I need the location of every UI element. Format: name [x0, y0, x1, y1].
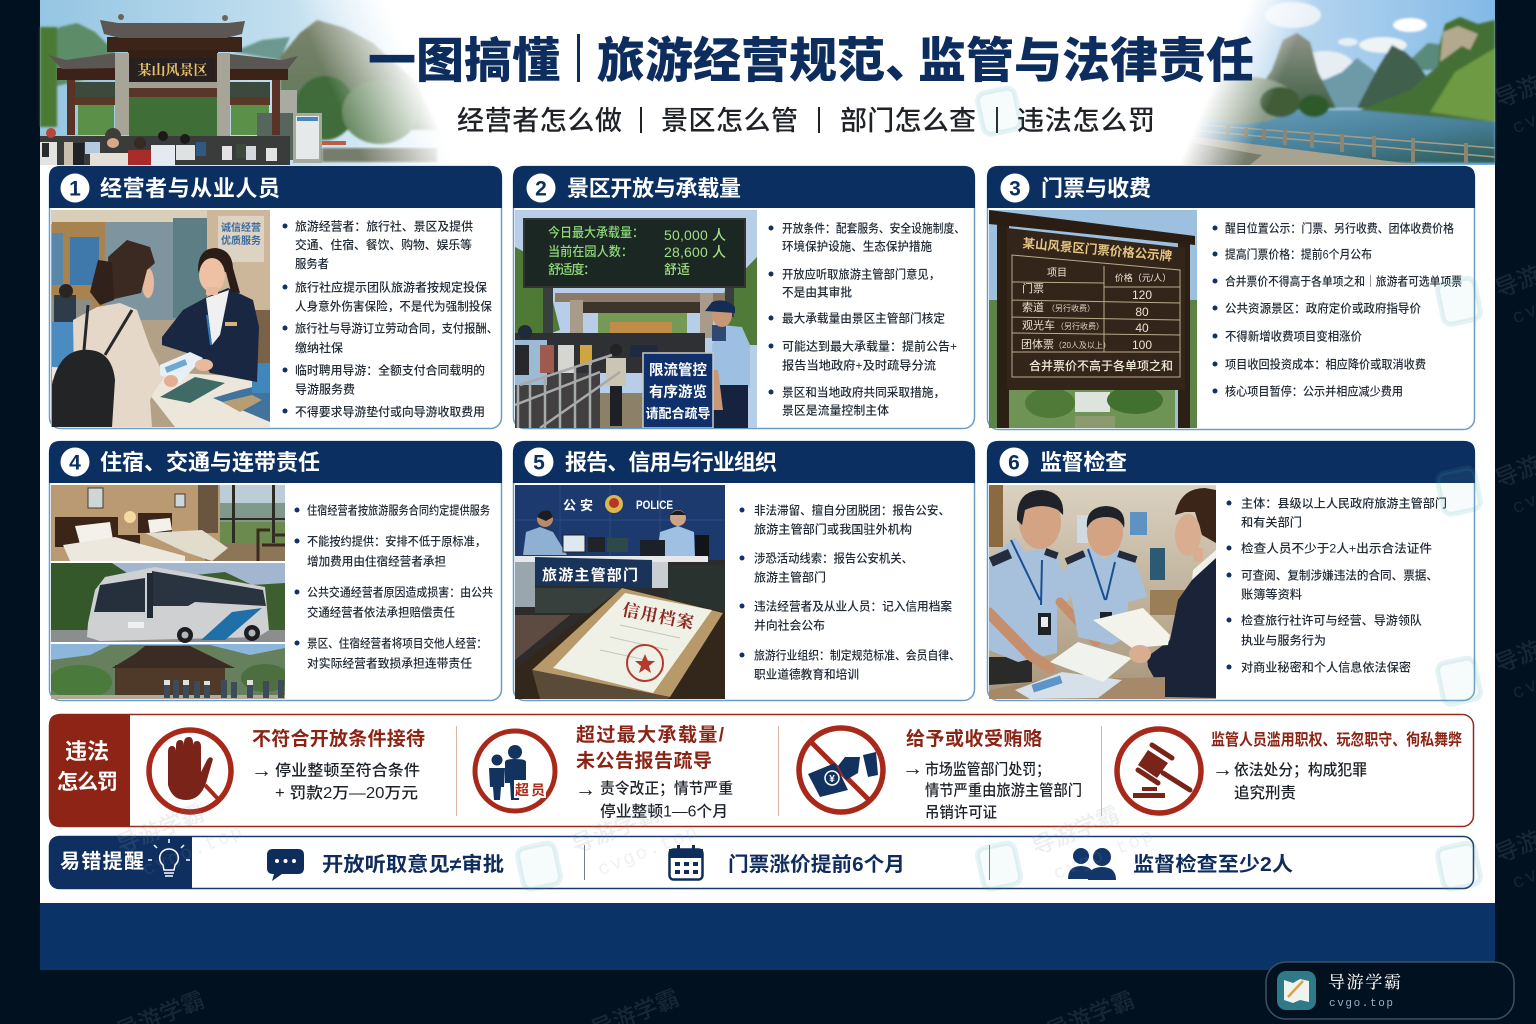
- panel 1 bullet list: 旅行社与导游订立劳动合同，支付报酬、: [295, 320, 498, 336]
- panel 1 bullet list: [282, 218, 498, 419]
- panel 2 bullet list: 报告当地政府+及时疏导分流: [782, 358, 936, 372]
- panel 3 bullet list: 合并票价不得高于各单项之和｜旅游者可选单项票: [1225, 274, 1462, 288]
- department sign: 旅游主管部门: [542, 566, 638, 584]
- icon: brand map: [1277, 971, 1316, 1010]
- violation 3 text: →: [902, 757, 923, 780]
- panel 4 bullet list: 不能按约提供：安排不低于原标准，: [307, 534, 486, 548]
- reminder 3: 监督检查至少2人: [1133, 852, 1293, 876]
- violation 2 text: 未公告报告疏导: [576, 749, 712, 772]
- panel 6: supervision and inspection: [987, 441, 1475, 700]
- price board: （另行收费）: [1056, 321, 1104, 331]
- panel 2 heading: [513, 166, 975, 208]
- icon: stop hand: [149, 730, 231, 812]
- icon: speech bubble: [267, 849, 304, 881]
- panel 5 bullet list: 旅游主管部门: [754, 570, 826, 584]
- panel 4 bullet list: 景区、住宿经营者将项目交他人经营：: [307, 636, 487, 650]
- brand url: cvgo.top: [1329, 998, 1393, 1010]
- violation 1 text: 不符合开放条件接待: [252, 728, 425, 750]
- brand name: 导游学霸: [1328, 973, 1401, 992]
- gate plaque: 某山风景区: [138, 62, 208, 79]
- price board: 某山风景区门票价格公示牌: [1022, 236, 1173, 264]
- brochure handover: [160, 352, 203, 383]
- reminder 2: 门票涨价提前6个月: [728, 853, 905, 876]
- panel 5 bullet list: 旅游行业组织：制定规范标准、会员自律、: [754, 648, 960, 662]
- panel 3 bullet list: 公共资源景区：政府定价或政府指导价: [1225, 300, 1421, 316]
- customer: [73, 303, 165, 427]
- inspector middle: [1060, 506, 1147, 645]
- panel 1: operators and staff: [49, 166, 502, 428]
- counter desk: [52, 367, 270, 427]
- panel 1 bullet list: 旅行社应提示团队旅游者按规定投保: [295, 280, 487, 294]
- crowd control sign: 请配合疏导: [645, 406, 711, 421]
- violation 2 text: 责令改正；情节严重: [600, 780, 733, 798]
- panel 5 bullet list: 非法滞留、擅自分团脱团：报告公安、: [754, 502, 950, 518]
- panel 3 bullet list: 提高门票价格：提前6个月公布: [1225, 246, 1372, 262]
- panel 6 heading: 监督检查: [1040, 450, 1127, 475]
- hero photo left: scenic gate: [40, 0, 480, 165]
- title: 一图搞懂: [368, 35, 560, 88]
- panel 1 bullet list: 服务者: [295, 256, 329, 271]
- panel 1 bullet list: 旅游经营者：旅行社、景区及提供: [295, 218, 473, 234]
- icon: two people: [1068, 848, 1116, 880]
- wooden desk: [515, 615, 570, 660]
- panel 1 photo: travel agency counter: 优质服务: [221, 234, 261, 247]
- panel 6 bullet list: 执业与服务行为: [1241, 632, 1326, 648]
- panel 4 bullet list: 公共交通经营者原因造成损害：由公共: [307, 584, 493, 600]
- panel 4 heading: [49, 441, 502, 483]
- penalty band label: 怎么罚: [57, 771, 118, 794]
- panel 6 photo: inspectors reviewing documents: [989, 485, 1216, 699]
- watermarks: 导游学霸: [113, 799, 208, 858]
- gate plaque: [130, 58, 215, 81]
- panel 6 bullet list: [1226, 496, 1447, 674]
- LED capacity board: 50,000 人: [664, 227, 726, 243]
- panel 4 bullet list: 住宿经营者按旅游服务合同约定提供服务: [307, 502, 490, 518]
- subtitle: 违法怎么罚: [1017, 106, 1155, 136]
- panel 6 bullet list: 账簿等资料: [1241, 586, 1302, 602]
- title: 监管与法律责任: [918, 35, 1254, 88]
- panel 6 bullet list: 和有关部门: [1241, 516, 1302, 530]
- panel 5 heading: 报告、信用与行业组织: [565, 450, 777, 475]
- panel 4: lodging, transport and joint liability: [48, 441, 502, 700]
- gate pillars: [115, 53, 129, 135]
- price board: 门票: [1022, 281, 1044, 295]
- hero photo right: karst river landscape: [1140, 0, 1495, 165]
- violation 2 text: 停业整顿1—6个月: [600, 802, 728, 820]
- panel 1 bullet list: 导游服务费: [295, 382, 355, 396]
- panel 3 bullet list: 项目收回投资成本：相应降价或取消收费: [1225, 356, 1426, 372]
- panel 2 heading: 景区开放与承载量: [567, 176, 741, 201]
- panel 4 heading: 4: [69, 452, 81, 474]
- violation 2 text: →: [575, 778, 596, 801]
- violation 3 text: 吊销许可证: [925, 804, 997, 822]
- panel 5 heading: 5: [533, 452, 545, 474]
- panel 2 bullet list: 可能达到最大承载量：提前公告+: [782, 338, 957, 354]
- panel 6 bullet list: 主体：县级以上人民政府旅游主管部门: [1241, 496, 1447, 510]
- panel 5 bullet list: 职业道德教育和培训: [754, 666, 859, 682]
- LED capacity board: 当前在园人数：: [548, 244, 633, 259]
- icon: gavel: [1117, 729, 1201, 813]
- panel 2 bullet list: 景区和当地政府共同采取措施，: [782, 384, 945, 400]
- watermarks: cvgo.top: [140, 821, 247, 881]
- brand badge: [1266, 962, 1514, 1019]
- price board: 索道: [1022, 300, 1044, 314]
- reminder 1: 开放听取意见≠审批: [322, 852, 504, 876]
- price board: 100: [1132, 338, 1152, 352]
- panel 1 bullet list: 人身意外伤害保险，不是代为强制投保: [295, 298, 492, 314]
- penalty band: how violations are punished: [49, 714, 1474, 827]
- panel 5 bullet list: [740, 502, 960, 682]
- reminder label with bulb: [49, 836, 192, 889]
- crowd control sign: [643, 353, 713, 428]
- panel 2 bullet list: 不是由其审批: [782, 284, 852, 300]
- crowd control sign: 限流管控: [649, 361, 707, 379]
- violation 4 text: →: [1212, 758, 1233, 781]
- panel 3 bullet list: [1212, 220, 1462, 398]
- visitor crowd: [40, 128, 290, 165]
- panel 3: tickets and fees: [987, 166, 1475, 430]
- panel 4 bullet list: 对实际经营者致损承担连带责任: [307, 656, 472, 670]
- backpack: [52, 350, 115, 427]
- price board: 项目: [1047, 267, 1067, 279]
- panel 3 bullet list: 不得新增收费项目变相涨价: [1225, 328, 1362, 344]
- subtitle: [457, 106, 1155, 136]
- visitor crowd and railing: [515, 325, 705, 428]
- panel 6 bullet list: 检查旅行社许可与经营、导游领队: [1241, 612, 1422, 628]
- violation 3 text: 情节严重由旅游主管部门: [925, 780, 1082, 800]
- violation 3 text: 市场监管部门处罚；: [925, 760, 1050, 778]
- panel 6 bullet list: 对商业秘密和个人信息依法保密: [1241, 660, 1411, 674]
- violation 4 text: 监管人员滥用职权、玩忽职守、徇私舞弊: [1211, 730, 1462, 749]
- subtitle: 景区怎么管: [661, 106, 798, 136]
- panel 4 bullet list: [294, 502, 493, 670]
- panel 5 photo: police desk and credit file: [515, 485, 725, 699]
- panel 3 bullet list: 醒目位置公示：门票、另行收费、团体收费价格: [1225, 220, 1454, 236]
- panel 1 bullet list: 交通、住宿、餐饮、购物、娱乐等: [295, 237, 472, 252]
- violation 2 text: 超过最大承载量/: [576, 724, 725, 746]
- panel 1 bullet list: 不得要求导游垫付或向导游收取费用: [295, 404, 485, 419]
- panel 3 photo: ticket price board: [989, 210, 1197, 428]
- penalty band label: [49, 714, 130, 827]
- panel 4 heading: 住宿、交通与连带责任: [100, 450, 320, 475]
- penalty band label: 违法: [65, 739, 109, 764]
- icon: no bribery: ¥: [829, 774, 835, 785]
- violation 3 text: 给予或收受贿赂: [906, 727, 1042, 750]
- panel 1 bullet list: 临时聘用导游：全额支付合同载明的: [295, 362, 485, 378]
- staff member: [162, 288, 259, 382]
- panel 5: reporting, credit and associations: [513, 441, 975, 700]
- LED capacity board: 舒适度：: [548, 262, 596, 277]
- gate main roof: [100, 14, 245, 82]
- panel 5 heading: [513, 441, 975, 483]
- panel 1 heading: 1: [69, 178, 81, 200]
- price board: 观光车: [1022, 318, 1055, 332]
- panel 2: scenic opening and capacity: [513, 166, 975, 428]
- guard: [705, 300, 750, 428]
- panel 6 heading: 6: [1008, 452, 1020, 474]
- price board: 团体票: [1021, 337, 1054, 351]
- icon: overcapacity people: [475, 731, 555, 811]
- desk and documents: [989, 608, 1170, 699]
- watermarks: 导游学霸: [1028, 801, 1123, 860]
- LED capacity board: 今日最大承载量：: [548, 225, 644, 240]
- common mistakes reminder band: [49, 836, 1474, 889]
- pavilion photo: [48, 644, 289, 699]
- price board: 价格（元/人）: [1115, 272, 1171, 283]
- panel 4 bullet list: 增加费用由住宿经营者承担: [307, 554, 446, 568]
- inspector left: [989, 490, 1096, 685]
- panel 1 photo: travel agency counter: 诚信经营: [221, 221, 261, 234]
- price board: （20人及以上）: [1054, 341, 1111, 350]
- violation 4 text: 依法处分；构成犯罪: [1234, 761, 1367, 779]
- coach bus photo: [51, 563, 285, 643]
- violation 2 text: [575, 724, 733, 820]
- info notice board: [293, 113, 322, 163]
- watermarks: 导游学霸: [568, 799, 663, 858]
- officers and monitors: [523, 510, 709, 558]
- panel 5 bullet list: 旅游主管部门或我国驻外机构: [754, 522, 912, 536]
- price board: （另行收费）: [1047, 303, 1095, 313]
- icon: no bribery: [799, 728, 883, 812]
- panel 2 bullet list: 最大承载量由景区主管部门核定: [782, 310, 945, 326]
- panel 2 bullet list: [768, 220, 965, 418]
- violation 1 text: [251, 728, 425, 802]
- icon: overcapacity people: 超员: [515, 782, 545, 798]
- panel 2 bullet list: 开放条件：配套服务、安全设施制度、: [782, 220, 965, 236]
- violation 1 text: →: [251, 759, 272, 782]
- panel 6 bullet list: 检查人员不少于2人+出示合法证件: [1241, 540, 1432, 556]
- LED capacity board: [524, 219, 745, 287]
- title: [368, 34, 1254, 88]
- woman in black suit: [1147, 488, 1216, 698]
- subtitle: 经营者怎么做: [457, 106, 622, 136]
- panel 2 bullet list: 开放应听取旅游主管部门意见，: [782, 266, 940, 282]
- panel 2 bullet list: 环境保护设施、生态保护措施: [782, 238, 932, 254]
- panel 6 heading: [987, 441, 1475, 483]
- panel 4 photos: hotel, coach, scenic pavilion: [48, 485, 289, 699]
- gate side wings: [48, 53, 298, 135]
- violation 4 text: [1211, 730, 1462, 802]
- LED capacity board: 舒适: [664, 262, 690, 277]
- panel 4 bullet list: 交通经营者依法承担赔偿责任: [307, 604, 455, 620]
- price board: 80: [1135, 305, 1149, 319]
- panel 6 bullet list: 可查阅、复制涉嫌违法的合同、票据、: [1241, 568, 1438, 582]
- panel 1 photo: travel agency counter: [51, 210, 270, 427]
- price board: 40: [1135, 321, 1149, 335]
- panel 3 heading: 门票与收费: [1041, 176, 1151, 201]
- reminder label with bulb: 易错提醒: [60, 850, 144, 873]
- bottom blue band: [40, 903, 1495, 970]
- panel 5 bullet list: 并向社会公布: [754, 618, 825, 632]
- panel 5 bullet list: 涉恐活动线索：报告公安机关、: [754, 550, 913, 566]
- violation 1 text: 停业整顿至符合条件: [275, 762, 420, 780]
- panel 3 heading: [987, 166, 1475, 208]
- panel 1 heading: [49, 166, 502, 208]
- crowd control sign: 有序游览: [649, 383, 707, 401]
- credit file: 信用档案: [621, 599, 695, 633]
- panel 2 heading: 2: [535, 178, 547, 200]
- price board: [1007, 228, 1185, 390]
- title: 旅游经营规范、: [597, 35, 933, 88]
- price board: 合并票价不高于各单项之和: [1029, 358, 1173, 373]
- hotel room photo: [51, 485, 285, 561]
- panel 5 bullet list: 违法经营者及从业人员：记入信用档案: [754, 598, 952, 614]
- price board: 120: [1132, 288, 1152, 302]
- panel 2 bullet list: 景区是流量控制主体: [782, 402, 889, 418]
- watermarks: cvgo.top: [595, 821, 702, 881]
- panel 5 photo: police desk and credit file: POLICE: [636, 498, 673, 512]
- panel 5 photo: police desk and credit file: 公 安: [563, 498, 593, 513]
- panel 2 photo: capacity display and crowd: [515, 210, 757, 428]
- violation 1 text: + 罚款2万—20万元: [275, 784, 418, 802]
- panel 3 bullet list: 核心项目暂停：公示并相应减少费用: [1225, 384, 1403, 398]
- icon: calendar: [669, 845, 703, 880]
- panel 1 bullet list: 缴纳社保: [295, 340, 343, 355]
- lakeside walkway bridge: [1157, 122, 1495, 165]
- panel 1 heading: 经营者与从业人员: [100, 176, 280, 201]
- panel 3 heading: 3: [1009, 178, 1021, 200]
- credit file: [532, 588, 723, 699]
- violation 4 text: 追究刑责: [1234, 783, 1296, 802]
- subtitle: 部门怎么查: [840, 106, 976, 136]
- violation 3 text: [902, 727, 1082, 822]
- watermarks: cvgo.top: [1050, 824, 1158, 885]
- LED capacity board: 28,600 人: [664, 244, 726, 260]
- department sign: [535, 557, 652, 588]
